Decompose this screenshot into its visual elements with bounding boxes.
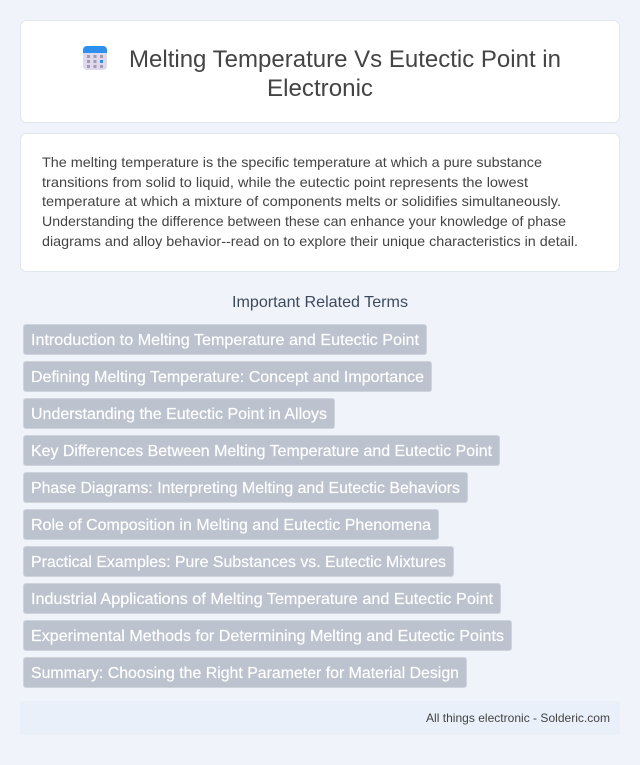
list: related term tags: [24, 324, 512, 688]
footer credit: All things electronic - Solderic.com: [426, 711, 610, 725]
tag 10: [24, 658, 466, 688]
tag 7: Practical Examples: Pure Substances vs. Eutectic Mixtures: [31, 554, 446, 571]
tag 5: Phase Diagrams: Interpreting Melting and Eutectic Behaviors: [31, 480, 460, 497]
text block: intro paragraph: The melting temperature is the specific temperature at which a pure substance: [42, 154, 542, 170]
text block: intro paragraph: [42, 154, 578, 249]
panel: intro text card: [20, 134, 620, 272]
tag 4: Key Differences Between Melting Temperature and Eutectic Point: [31, 443, 493, 460]
tag 6: Role of Composition in Melting and Eutectic Phenomena: [31, 517, 431, 534]
tag 9: [24, 620, 512, 650]
tag 8: Industrial Applications of Melting Temperature and Eutectic Point: [31, 591, 494, 608]
panel: title card: [20, 20, 620, 122]
title: Electronic: [267, 75, 373, 102]
icon: calendar: [83, 46, 107, 70]
tag 4: [24, 436, 500, 466]
title: Melting Temperature Vs Eutectic Point in: [129, 46, 561, 73]
tag 5: [24, 472, 468, 502]
tag 1: Introduction to Melting Temperature and Eutectic Point: [31, 332, 420, 349]
tag 3: [24, 398, 334, 428]
tag 10: Summary: Choosing the Right Parameter for Material Design: [31, 665, 459, 682]
tag 3: Understanding the Eutectic Point in Alloys: [31, 406, 327, 423]
tag 2: Defining Melting Temperature: Concept and Importance: [31, 369, 424, 386]
heading: important related terms: Important Related Terms: [232, 294, 408, 311]
tag 6: [24, 510, 438, 540]
tag 2: [24, 362, 432, 392]
tag 9: Experimental Methods for Determining Melting and Eutectic Points: [31, 628, 504, 645]
title: [129, 46, 561, 102]
text block: intro paragraph: diagrams and alloy behavior--read on to explore their unique characteristics in detail.: [42, 233, 578, 249]
tag 1: [24, 324, 426, 354]
text block: intro paragraph: temperature at which a mixture of components melts or solidifies simultaneously.: [42, 193, 561, 209]
footer bar: [20, 701, 620, 735]
tag 8: [24, 584, 500, 614]
text block: intro paragraph: transitions from solid to liquid, while the eutectic point represents the lowest: [42, 174, 528, 190]
tag 7: [24, 546, 454, 576]
text block: intro paragraph: Understanding the difference between these can enhance your knowledge of phase: [42, 213, 566, 229]
